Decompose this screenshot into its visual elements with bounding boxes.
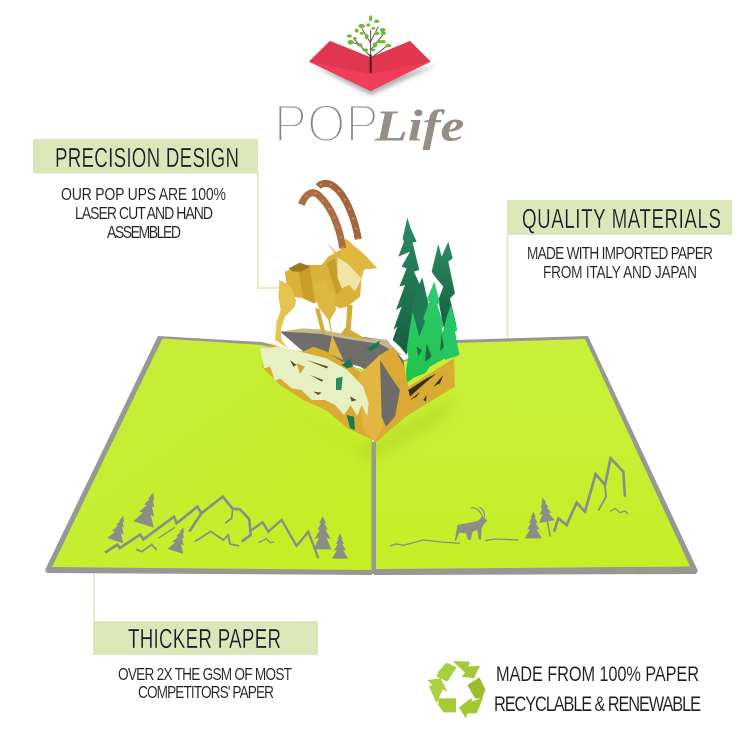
text: recyclable note: MADE FROM 100% PAPER	[496, 662, 699, 685]
panel: thicker paper	[93, 621, 318, 702]
body text	[61, 184, 226, 242]
icon: recycling arrows	[427, 661, 486, 718]
logo: POP wordmark: POP	[274, 95, 379, 154]
body text	[118, 666, 292, 702]
body text	[527, 245, 713, 282]
card: right panel	[374, 336, 698, 575]
body text: LASER CUT AND HAND	[75, 203, 213, 223]
body text: OVER 2X THE GSM OF MOST	[118, 666, 292, 684]
heading band	[507, 200, 732, 235]
pop-up: snow slope	[260, 347, 369, 416]
pop-up: pine trees	[393, 218, 459, 383]
leader line: quality materials	[506, 235, 508, 339]
logo	[274, 15, 464, 154]
cut-out: ibex	[455, 516, 487, 541]
panel: precision design	[33, 139, 258, 242]
body text: OUR POP UPS ARE 100%	[61, 184, 226, 204]
heading: THICKER PAPER	[128, 623, 281, 654]
body text: ASSEMBLED	[107, 222, 181, 242]
text: recyclable note	[494, 662, 701, 715]
logo: Life wordmark: Life	[374, 102, 464, 151]
pop-up: ibex on rock with pine trees	[260, 183, 459, 442]
logo: red open book	[309, 41, 431, 91]
pop-up: rear cavity	[280, 329, 407, 383]
leader line: thicker paper	[93, 574, 95, 621]
text: recyclable note: RECYCLABLE & RENEWABLE	[494, 692, 701, 715]
leader line: precision design	[258, 173, 278, 288]
cut-out: left mountains and trees	[105, 490, 348, 559]
pop-up card base	[45, 336, 698, 575]
pop-up: ibex body	[275, 238, 377, 360]
panel: quality materials	[507, 200, 732, 282]
heading band	[33, 139, 258, 174]
body text: COMPETITORS' PAPER	[138, 684, 274, 702]
body text: MADE WITH IMPORTED PAPER	[527, 245, 713, 263]
cut-out: right ibex, trees and mountains	[390, 458, 628, 546]
heading: PRECISION DESIGN	[55, 142, 239, 173]
card: shadow under pop-up	[270, 370, 480, 460]
card: left panel	[45, 336, 372, 575]
logo: tree	[347, 15, 391, 73]
pop-up: rock base	[262, 343, 455, 442]
pop-up: ibex horns	[301, 183, 358, 248]
heading: QUALITY MATERIALS	[522, 203, 721, 234]
card: centre fold	[372, 442, 374, 574]
heading band	[93, 621, 318, 655]
body text: FROM ITALY AND JAPAN	[543, 264, 697, 282]
logo shadow	[315, 65, 437, 95]
